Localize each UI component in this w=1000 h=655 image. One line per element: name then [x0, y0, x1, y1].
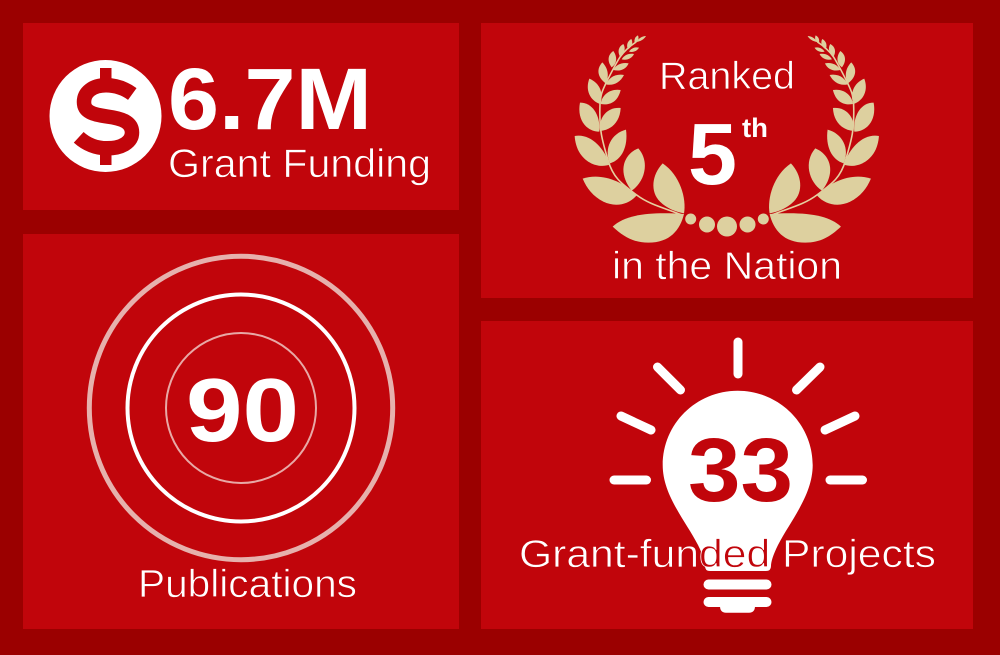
panel background [23, 23, 459, 210]
stat: 5: 5 [688, 106, 737, 203]
stat: 33: 33 [688, 421, 793, 521]
label: Publications: Publications [138, 563, 357, 606]
stat: 6.7M: 6.7M [168, 51, 372, 148]
panel: grant funding [23, 23, 459, 210]
icon: dollar coin [50, 60, 162, 172]
panel: grant-funded projects [481, 321, 973, 629]
panel background [23, 234, 459, 629]
icon: laurel wreath [575, 35, 879, 243]
icon: light bulb [663, 391, 813, 613]
stat: 90: 90 [186, 361, 299, 461]
stat suffix: th: th [742, 113, 768, 143]
icon: light rays [614, 342, 862, 480]
label: Grant-funded Projects: Grant-fun ded Projects [519, 533, 936, 576]
label: Grant Funding: Grant Funding [168, 142, 431, 186]
icon: concentric rings [89, 256, 393, 560]
panel: publications [23, 234, 459, 629]
panel background [481, 23, 973, 298]
label: Ranked: Ranked [659, 55, 795, 98]
panel background [481, 321, 973, 629]
panel: national ranking [481, 23, 973, 298]
label: in the Nation: in the Nation [612, 245, 842, 288]
